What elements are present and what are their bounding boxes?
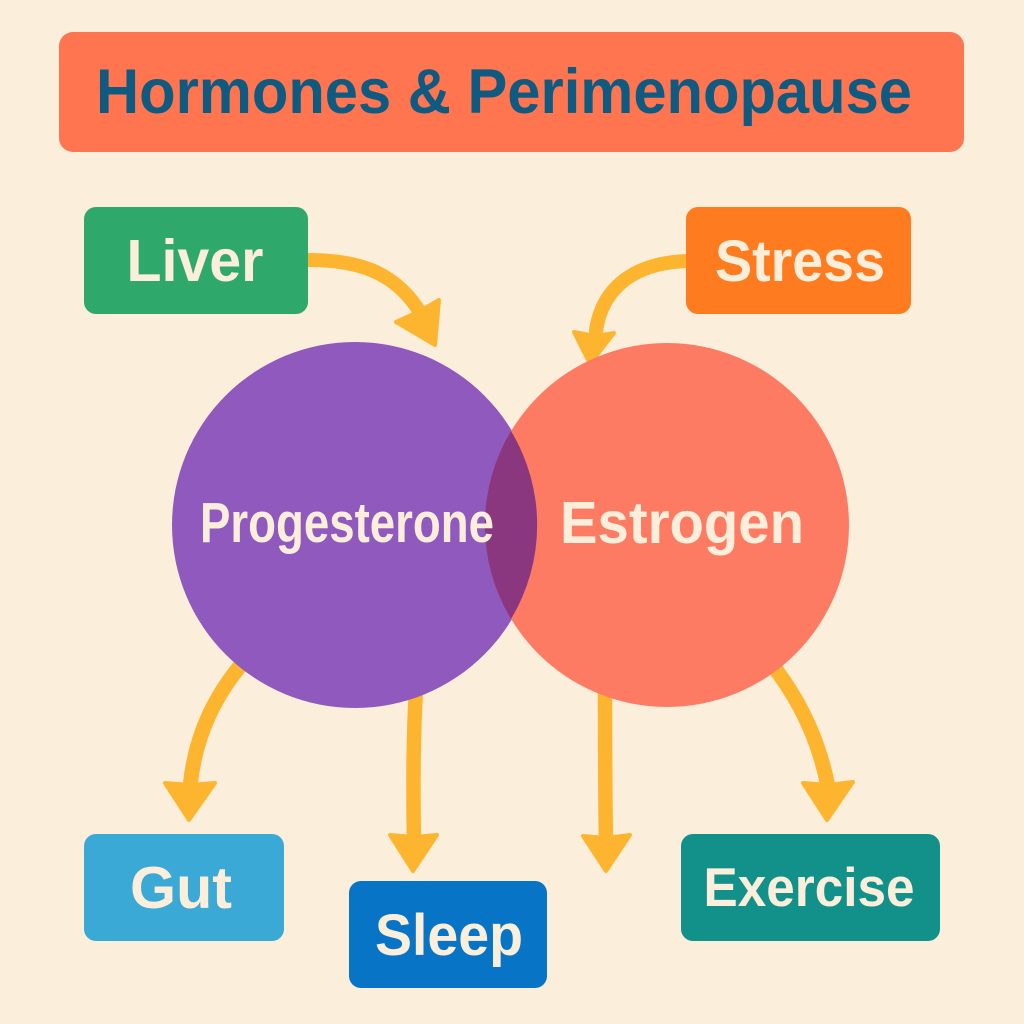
box: liver: Liver	[126, 228, 264, 294]
title	[59, 32, 964, 152]
label: estrogen: Estrogen	[560, 490, 804, 556]
circle overlap	[485, 431, 537, 619]
arrow: progesterone to gut	[165, 660, 245, 820]
label: progesterone: Progesterone	[200, 491, 494, 555]
box: exercise: Exercise	[704, 856, 914, 918]
title: Hormones & Perimenopause	[96, 57, 912, 127]
circle: progesterone	[172, 342, 538, 708]
box: exercise	[681, 834, 940, 941]
box: gut: Gut	[130, 855, 232, 921]
box: gut	[84, 834, 284, 941]
circle: estrogen	[485, 343, 849, 707]
arrow: stress to estrogen	[574, 261, 687, 364]
box: liver	[84, 207, 308, 314]
box: stress	[686, 207, 911, 314]
arrow: progesterone to sleep	[390, 690, 437, 871]
arrow: liver to progesterone	[308, 260, 439, 345]
box: sleep: Sleep	[375, 903, 523, 968]
arrow: estrogen to exercise	[770, 662, 853, 820]
box: sleep	[349, 881, 547, 988]
box: stress: Stress	[715, 229, 885, 294]
arrow: estrogen downward	[583, 690, 630, 871]
